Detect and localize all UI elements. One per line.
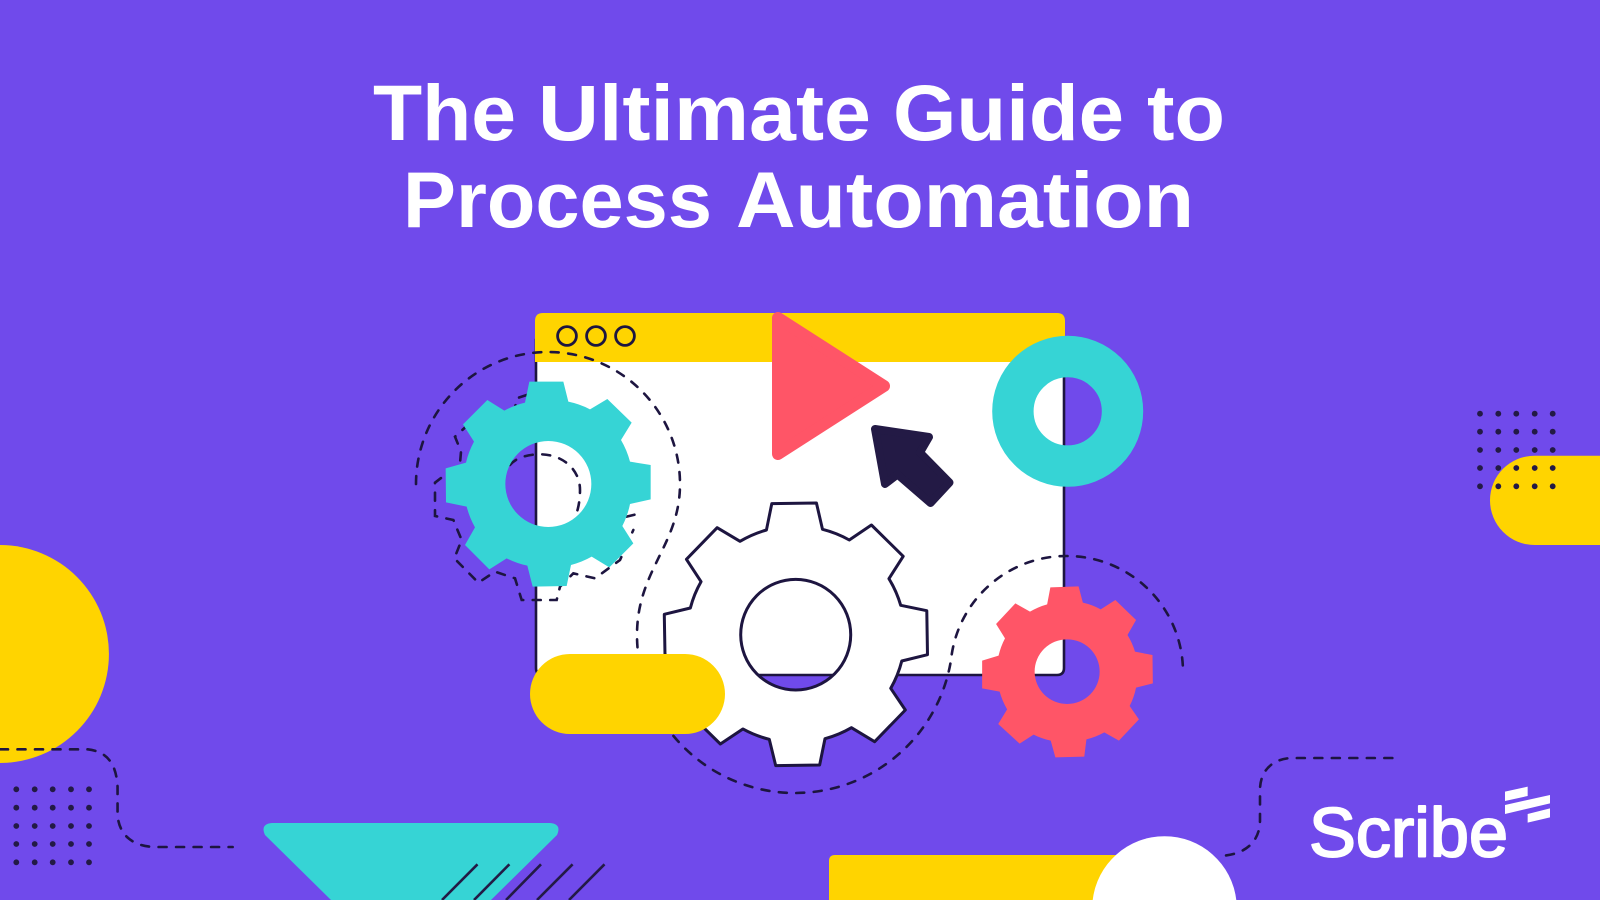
window control dots: [558, 327, 634, 345]
logo: Scribe: [1309, 787, 1550, 872]
icon: white outlined gear: [664, 503, 927, 766]
icon: teal gear: [446, 382, 651, 587]
decoration: diagonal lines: [442, 864, 604, 900]
browser window: [535, 313, 1065, 675]
icon: dashed outline gear behind teal gear: [435, 395, 640, 600]
logo stripes: [1505, 787, 1550, 823]
window body: [536, 340, 1064, 675]
decoration: left dot grid: [13, 786, 92, 865]
title: Guide: [893, 68, 1124, 157]
icon: yellow pill: [530, 654, 725, 734]
decoration: left yellow circle: [0, 545, 109, 763]
icon: cursor arrow: [875, 429, 950, 503]
decoration: bottom white circle: [1093, 836, 1236, 900]
icon: play triangle: [778, 318, 884, 454]
icon: red gear: [982, 586, 1153, 757]
decoration: right dot grid: [1477, 411, 1556, 489]
title: The: [373, 68, 516, 157]
decoration: teal triangle: [264, 823, 558, 900]
title: Process: [403, 155, 712, 244]
logo wordmark: Scribe: [1309, 794, 1508, 872]
title: Automation: [736, 155, 1194, 244]
title: [373, 68, 1225, 244]
title: to: [1147, 68, 1225, 157]
window title bar: [535, 313, 1065, 362]
title: Ultimate: [538, 68, 871, 157]
icon: teal ring: [1013, 356, 1122, 466]
decoration: left dashed connector: [0, 749, 233, 847]
dashed S-curve path around gears: [416, 352, 1183, 793]
decoration: right dashed connector: [1217, 758, 1392, 856]
decoration: bottom yellow bar: [829, 855, 1140, 900]
decoration: right yellow pill: [1490, 456, 1600, 545]
